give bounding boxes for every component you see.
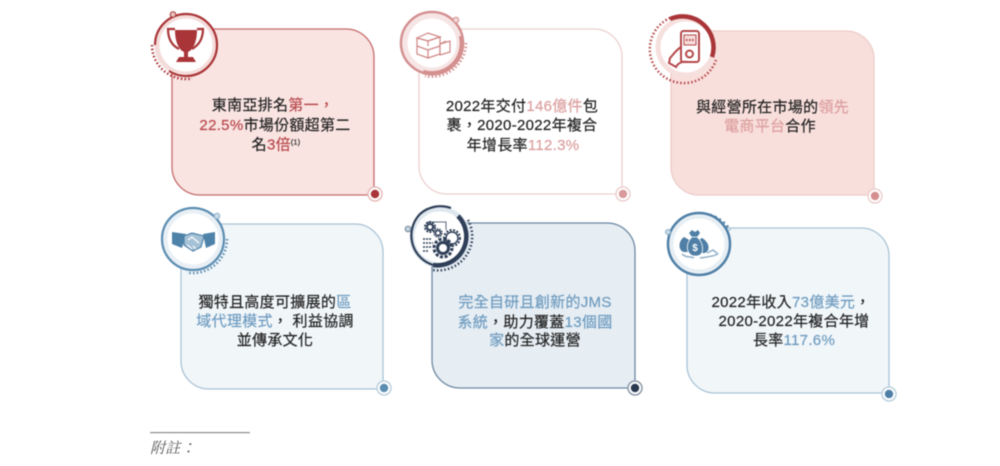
- text: ranking first in Southeast Asia: 東南亞排名第一，: [212, 97, 334, 114]
- text: regional agent model: 域代理模式， 利益協調: [196, 313, 354, 330]
- panel: revenue: [666, 213, 896, 401]
- text: revenue in 2022: 2022年收入73億美元，: [712, 294, 870, 311]
- text: parcels delivered in 2022: 裹，2020-2022年複合: [447, 117, 597, 134]
- text: self-developed JMS system: 系統，助力覆蓋13個國: [457, 314, 613, 331]
- panel: parcels delivered: [401, 12, 630, 201]
- marker dot: [628, 381, 642, 395]
- text: ranking first in Southeast Asia: 22.5%市場份額超第二: [199, 117, 351, 134]
- marker dot: [368, 187, 382, 201]
- card background: [419, 29, 622, 194]
- text: revenue in 2022: 2020-2022年複合年增: [719, 313, 869, 330]
- panel: e-commerce partners: [650, 16, 882, 203]
- icon: phone in hand: [650, 16, 716, 83]
- text: parcels delivered in 2022: 2022年交付146億件包: [446, 98, 598, 115]
- marker dot: [377, 381, 391, 395]
- icon: trophy: [152, 12, 217, 79]
- panel: JMS system: [405, 206, 642, 395]
- icon: handshake: [162, 208, 227, 273]
- footnote label: 附註：: [150, 440, 196, 457]
- card background: [181, 224, 383, 389]
- card background: [172, 29, 374, 195]
- text: cooperating with leading e-commerce platforms: 電商平台合作: [724, 118, 816, 135]
- marker dot: [868, 189, 882, 203]
- text: ranking first in Southeast Asia: 名3倍: [252, 136, 291, 154]
- icon: money bags: [666, 213, 730, 275]
- footnote rule: [150, 432, 250, 433]
- panel: regional agent model: [162, 208, 391, 395]
- text: self-developed JMS system: 家的全球運營: [489, 332, 581, 349]
- text: cooperating with leading e-commerce platforms: 與經營所在市場的領先: [696, 99, 849, 116]
- card background: [687, 228, 889, 393]
- dollar sign: $: [692, 243, 698, 254]
- text: regional agent model: 並傳承文化: [237, 332, 313, 349]
- text: self-developed JMS system: 完全自研且創新的JMS: [458, 294, 612, 311]
- text: parcels delivered in 2022: 年增長率112.3%: [467, 137, 579, 154]
- panel: market leader: [152, 12, 382, 201]
- card background: [671, 31, 874, 195]
- icon: gears: [405, 206, 472, 270]
- card background: [432, 223, 635, 388]
- text: ranking first in Southeast Asia: (1): [291, 140, 300, 146]
- text: regional agent model: 獨特且高度可擴展的區: [198, 294, 352, 311]
- text: revenue in 2022: 長率117.6%: [753, 332, 835, 349]
- marker dot: [882, 387, 896, 401]
- icon: boxes: [401, 12, 466, 77]
- marker dot: [616, 187, 630, 201]
